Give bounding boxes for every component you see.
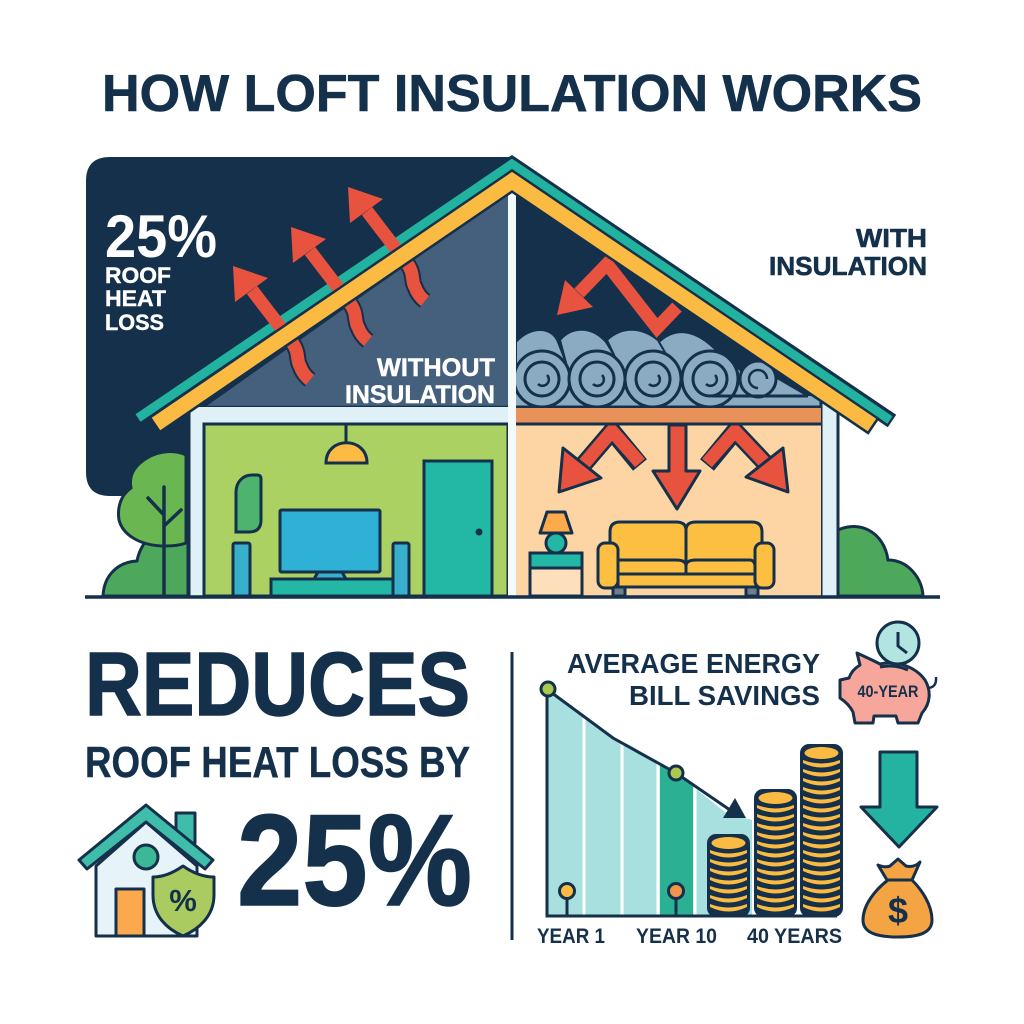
ceiling lamp: [326, 424, 367, 463]
bush: right: [838, 527, 923, 596]
room: right peach: [516, 424, 821, 596]
door: [424, 461, 492, 596]
label: without insulation: [345, 354, 495, 409]
label: without insulation: WITHOUT: [377, 354, 495, 382]
label: with insulation: WITH: [856, 223, 927, 253]
coin stack: medium: [754, 789, 797, 917]
television: [233, 510, 409, 596]
icon: piggy bank with clock: 40-YEAR: [858, 682, 918, 701]
savings chart: [541, 682, 837, 916]
stat: 25% roof heat loss: LOSS: [105, 310, 164, 335]
heading: reduces roof heat loss: REDUCES: [85, 635, 470, 735]
arrow: heat escaping 1: [233, 266, 310, 380]
roof: yellow inner layer: [154, 181, 874, 426]
stat: 25% roof heat loss: ROOF: [105, 263, 171, 288]
chart heading: AVERAGE ENERGY: [567, 648, 820, 679]
tree: left: [118, 452, 186, 596]
label: with insulation: [769, 223, 927, 281]
wall mirror: [236, 475, 261, 532]
divider: [510, 652, 514, 940]
icon: piggy bank with clock: [840, 622, 936, 723]
attic: without insulation: [203, 190, 510, 407]
icon: house with shield: [79, 805, 214, 936]
room: left green: [204, 424, 508, 596]
panel: dark backdrop: [86, 157, 512, 496]
roof: teal outer layer: [136, 164, 892, 421]
house walls: [189, 398, 838, 597]
chart axis labels: 40 YEARS: [747, 925, 842, 948]
stat: 25% roof heat loss: 25%: [105, 203, 217, 270]
coin stack: tall: [800, 744, 843, 917]
coin stack: small: [707, 834, 750, 917]
bush: left: [103, 532, 188, 596]
heading: reduces roof heat loss: ROOF HEAT LOSS BY: [85, 738, 470, 787]
attic: with insulation: [516, 190, 820, 407]
title: HOW LOFT INSULATION WORKS: [102, 65, 922, 123]
centre divider: [508, 188, 516, 597]
sofa: [598, 522, 774, 596]
stat: 25% roof heat loss: HEAT: [105, 286, 167, 311]
arrow: heat escaping 2: [291, 227, 368, 341]
arrow: heat escaping 3: [348, 187, 425, 301]
room arrows: trapped heat: [516, 408, 821, 509]
insulation board: [516, 408, 821, 423]
insulation rolls: [514, 330, 820, 407]
stat: 25%: 25%: [237, 787, 472, 933]
chart axis labels: YEAR 10: [636, 925, 717, 948]
icon: money bag: [863, 859, 932, 937]
side table and lamp: [530, 512, 582, 596]
arrow: heat reflected in attic: [557, 264, 677, 328]
label: without insulation: INSULATION: [345, 381, 495, 409]
chart heading: BILL SAVINGS: [629, 680, 820, 711]
icon: money bag: $: [888, 890, 908, 931]
icon: house with shield: %: [169, 883, 197, 918]
label: with insulation: INSULATION: [769, 251, 927, 281]
chart axis labels: [537, 925, 842, 948]
arrow: savings down: [861, 752, 937, 847]
chart axis labels: YEAR 1: [537, 925, 605, 948]
heading: reduces roof heat loss: [85, 635, 470, 787]
stat: 25% roof heat loss: [105, 203, 217, 335]
ground line: [85, 595, 940, 599]
chart heading: [567, 648, 820, 711]
